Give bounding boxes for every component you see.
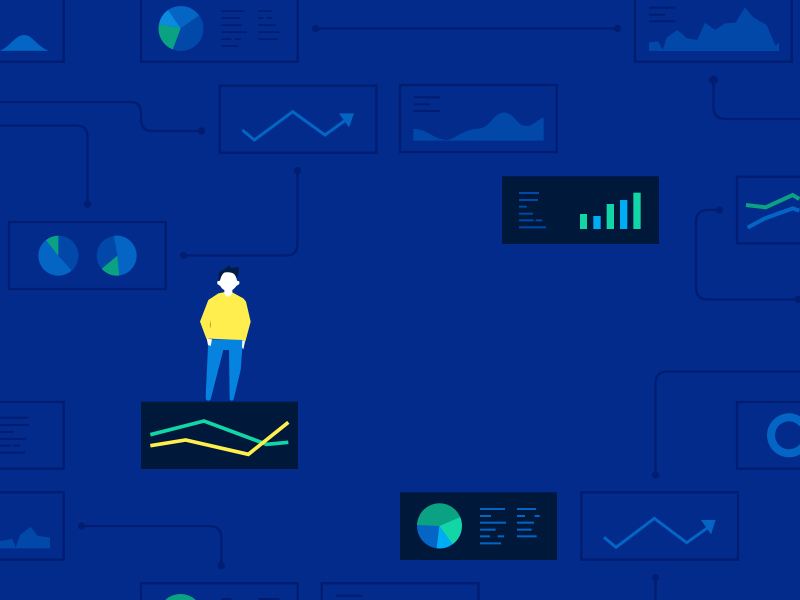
connector: top horizontal line [312, 25, 621, 32]
hands [207, 338, 245, 349]
panel: top-right area chart [635, 0, 792, 62]
panel: bottom text [322, 583, 478, 600]
panel: rising line chart [220, 86, 376, 153]
text lines [519, 192, 546, 228]
trend arrow [242, 112, 354, 140]
panel: dark pie and legend [400, 492, 557, 560]
bars [580, 193, 641, 229]
head and neck [217, 272, 239, 297]
arm gap [210, 320, 211, 329]
panel: lower rising line chart [581, 492, 738, 560]
connector: lower right [652, 372, 800, 479]
trousers [206, 339, 243, 401]
connector: left line to pie panel [0, 126, 91, 208]
connector: line chart panel to pie panel [180, 167, 301, 259]
pie chart [417, 503, 462, 548]
pie chart [158, 6, 204, 51]
panel: donut [737, 402, 800, 469]
green line [150, 421, 288, 444]
panel: right line chart [737, 177, 800, 243]
panel: bottom pie [141, 583, 298, 600]
donut chart [767, 413, 800, 457]
legend lines [221, 10, 280, 47]
connector: right loop [696, 206, 800, 303]
panel: left text lines [0, 402, 64, 469]
panel: top pie and legend [141, 0, 298, 62]
yellow line [150, 422, 288, 454]
panel: left area chart [0, 492, 64, 560]
panel: two pies [9, 222, 166, 289]
connector: top right [709, 76, 800, 119]
connector: bottom stub [652, 574, 659, 600]
person standing on the chart panel [200, 265, 251, 401]
sweater [200, 292, 251, 342]
panel: dark line chart [141, 402, 298, 469]
panel: smooth area chart [400, 85, 557, 152]
pie right [97, 236, 137, 276]
panel: top-left area chart [0, 0, 64, 62]
trend arrow [604, 518, 716, 547]
legend lines [480, 508, 540, 544]
connector: left line to line chart panel [0, 102, 205, 135]
connector: lower left [78, 522, 225, 569]
pie left [38, 236, 78, 276]
panel: dark bar chart [502, 176, 659, 244]
hair [218, 265, 239, 281]
